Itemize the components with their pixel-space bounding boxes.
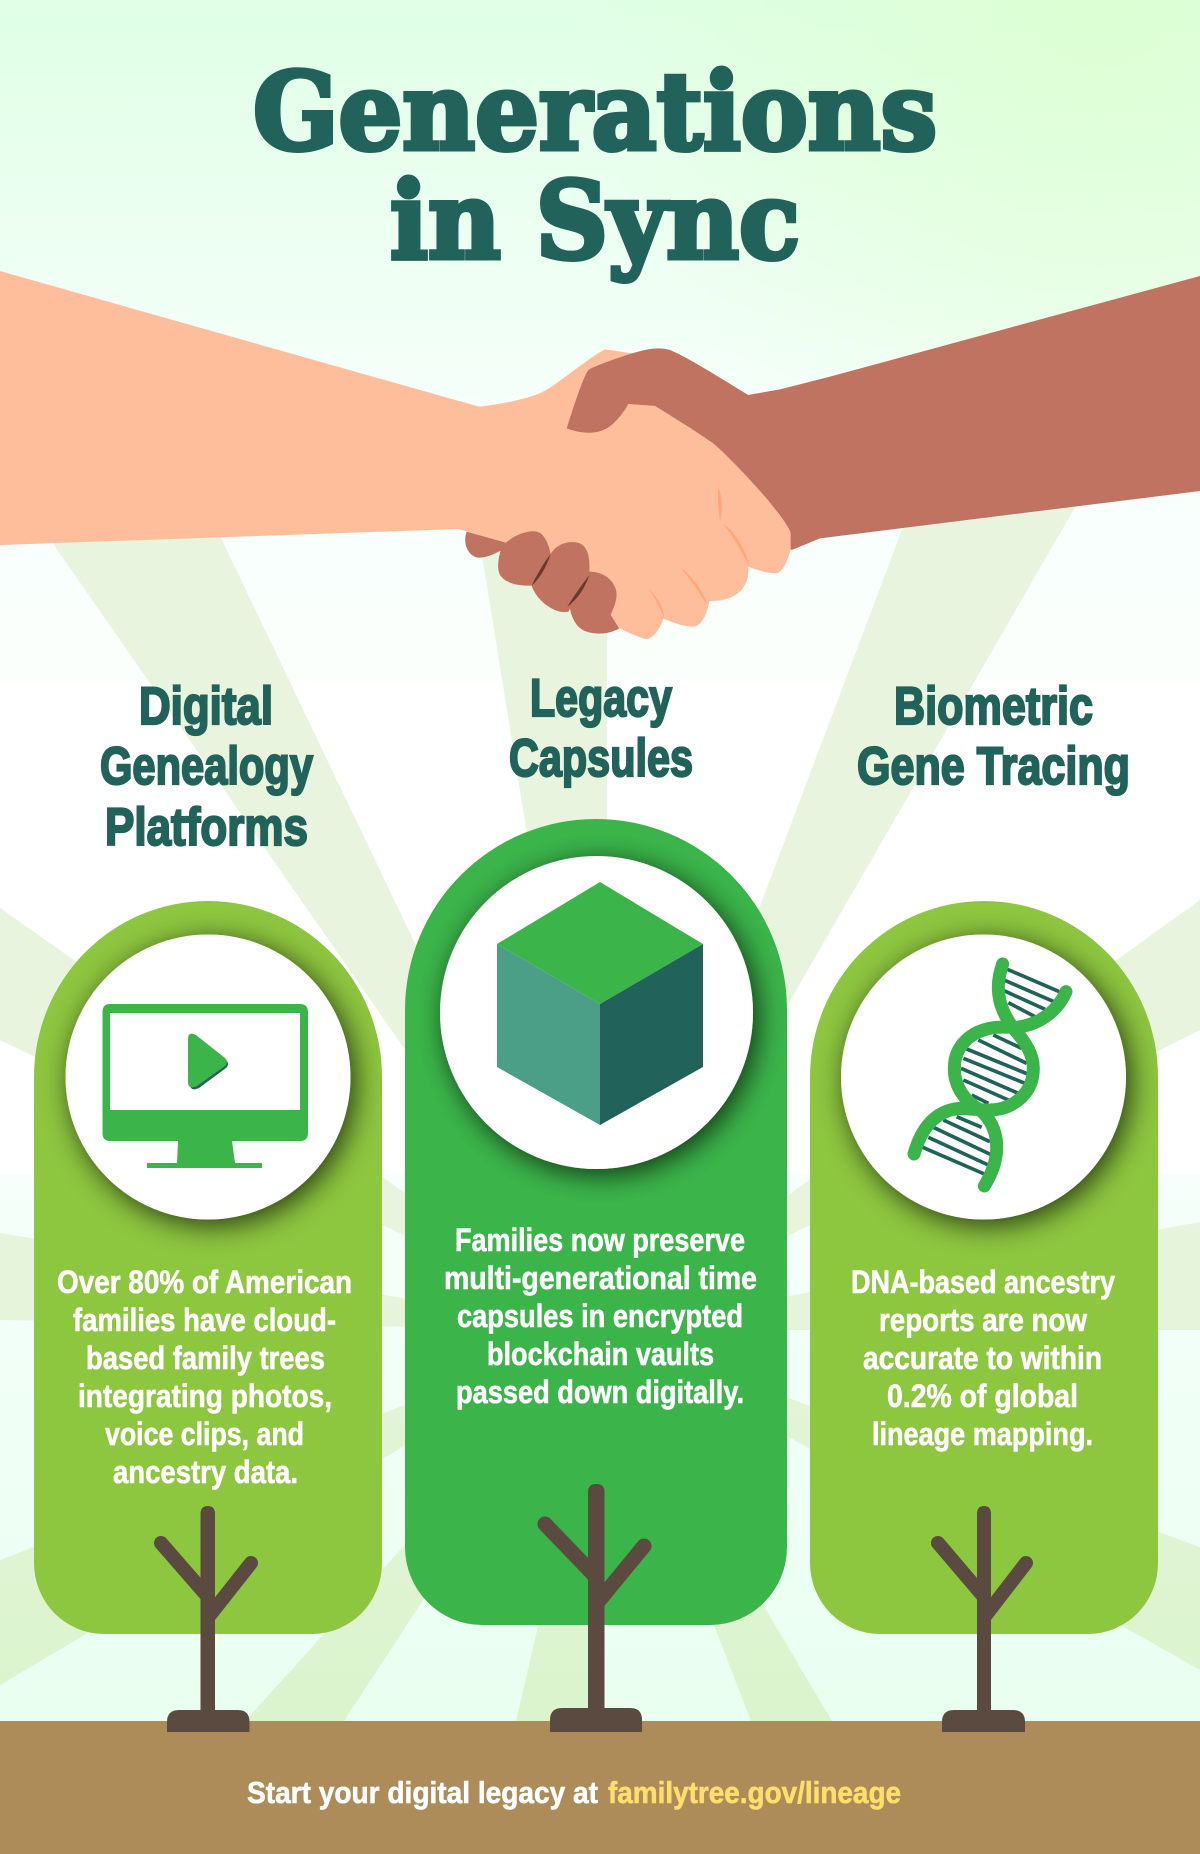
body text: Families now preserve xyxy=(455,1222,745,1258)
heading: digital genealogy platforms: Genealogy xyxy=(100,737,313,796)
illustration: handshake xyxy=(0,271,1200,639)
body text: multi-generational time xyxy=(444,1260,757,1296)
icon: tree xyxy=(938,1506,1026,1732)
heading: digital genealogy platforms: Platforms xyxy=(105,798,308,857)
sun rays xyxy=(0,400,1200,1721)
heading: digital genealogy platforms xyxy=(100,677,313,857)
body text: ancestry data. xyxy=(113,1454,298,1490)
body text: accurate to within xyxy=(863,1340,1102,1376)
body text: 0.2% of global xyxy=(887,1378,1078,1414)
icon: monitor with play button xyxy=(102,1004,308,1168)
icon: cube xyxy=(497,882,703,1125)
heading: legacy capsules: Capsules xyxy=(509,729,693,788)
icon circle xyxy=(841,934,1126,1220)
panel: legacy capsules xyxy=(405,669,787,1732)
heading: legacy capsules xyxy=(509,669,693,788)
icon circle xyxy=(66,934,350,1220)
body text: lineage mapping. xyxy=(872,1416,1093,1452)
card shape xyxy=(405,819,787,1625)
call to action footer: Start your digital legacy at xyxy=(247,1775,598,1810)
body text xyxy=(57,1264,352,1490)
body text xyxy=(851,1264,1115,1452)
body text: passed down digitally. xyxy=(456,1374,744,1410)
call to action footer: familytree.gov/lineage xyxy=(608,1775,901,1810)
card shape xyxy=(810,901,1158,1634)
heading: biometric gene tracing: Gene Tracing xyxy=(857,737,1130,796)
body text: voice clips, and xyxy=(105,1416,304,1452)
heading: biometric gene tracing: Biometric xyxy=(894,677,1093,736)
icon: tree xyxy=(545,1484,644,1732)
icon: tree xyxy=(161,1506,251,1732)
body text: DNA-based ancestry xyxy=(851,1264,1115,1300)
heading: biometric gene tracing xyxy=(857,677,1130,796)
card shape xyxy=(34,901,382,1634)
icon: dna helix xyxy=(914,964,1066,1186)
body text: reports are now xyxy=(879,1302,1087,1338)
body text: Over 80% of American xyxy=(57,1264,352,1300)
ground xyxy=(0,1721,1200,1854)
icon circle xyxy=(440,856,753,1169)
call to action footer xyxy=(247,1775,901,1810)
heading: legacy capsules: Legacy xyxy=(530,669,672,728)
title: Generations xyxy=(253,50,937,175)
body text: integrating photos, xyxy=(78,1378,332,1414)
panel: digital genealogy platforms xyxy=(34,677,382,1732)
heading: digital genealogy platforms: Digital xyxy=(139,677,273,736)
body text: capsules in encrypted xyxy=(457,1298,743,1334)
body text: based family trees xyxy=(86,1340,325,1376)
body text: blockchain vaults xyxy=(487,1336,714,1372)
panel: biometric gene tracing xyxy=(810,677,1158,1732)
title: in Sync xyxy=(390,159,800,284)
body text: families have cloud- xyxy=(73,1302,336,1338)
title xyxy=(253,50,937,284)
body text xyxy=(444,1222,757,1410)
